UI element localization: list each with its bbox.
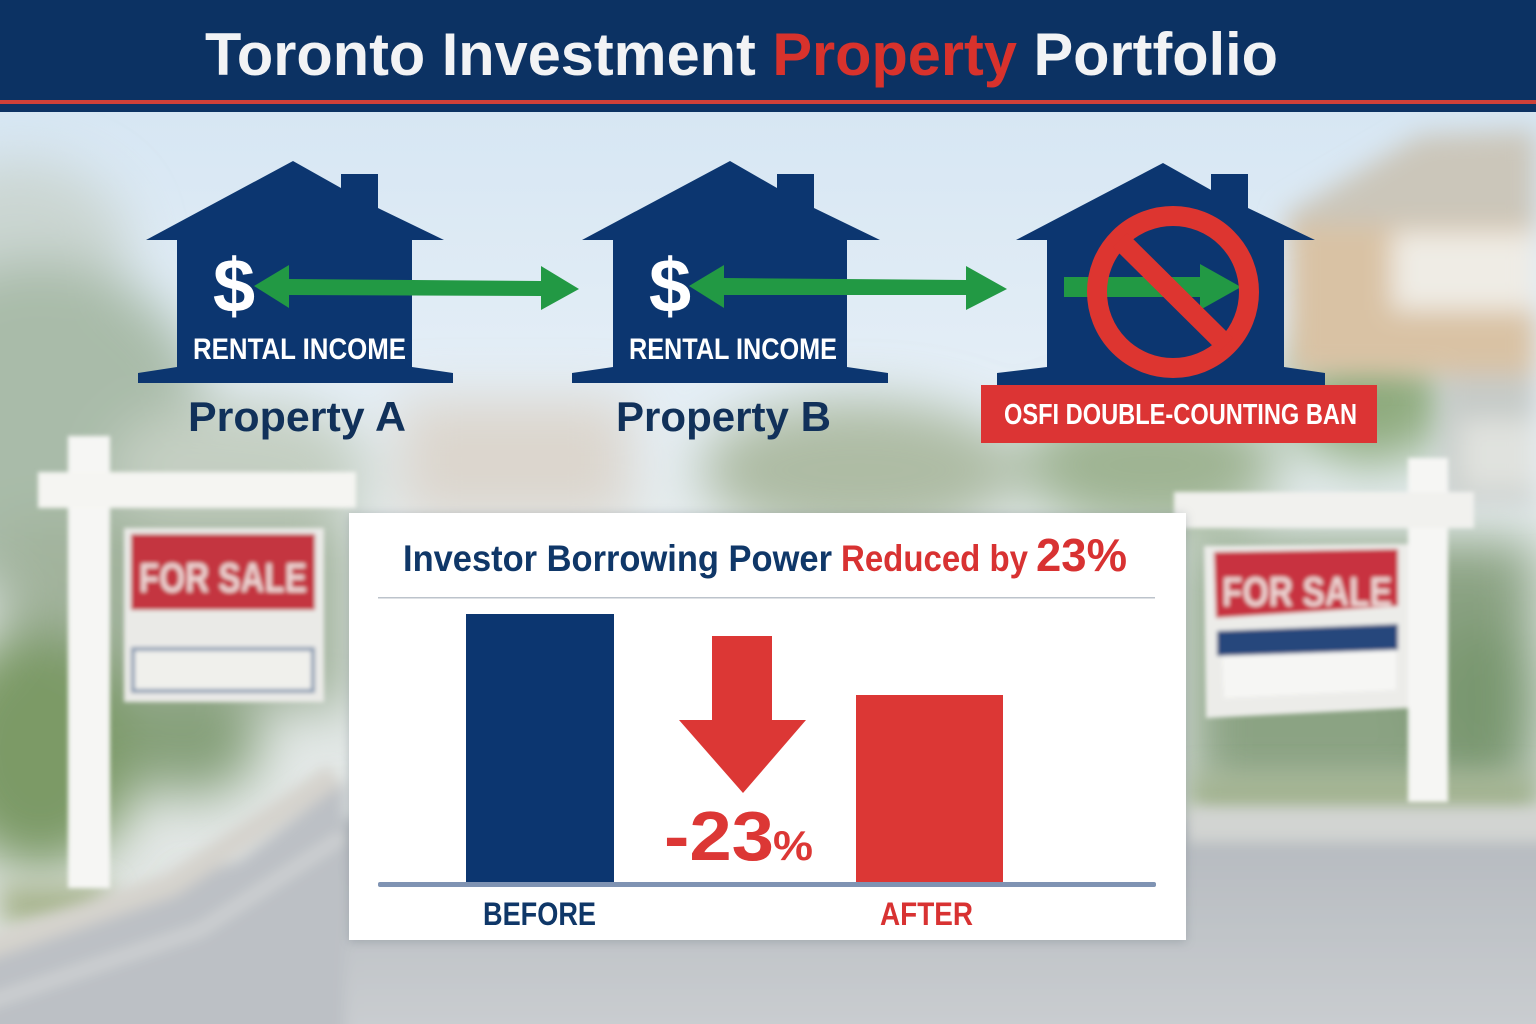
house: Property B bbox=[572, 161, 888, 383]
dollar icon: $ bbox=[213, 244, 255, 329]
chart panel: 23% bbox=[1036, 529, 1127, 581]
OSFI ban banner: OSFI DOUBLE-COUNTING BAN bbox=[1004, 399, 1357, 431]
change label: -23 bbox=[664, 797, 774, 875]
rental income label: RENTAL INCOME bbox=[629, 333, 837, 366]
blocked green arrow bbox=[1064, 264, 1241, 310]
chart panel bbox=[349, 513, 1186, 942]
for sale sign: left: FOR SALE bbox=[139, 554, 307, 601]
header band bbox=[0, 0, 1536, 112]
chart panel: % bbox=[773, 822, 813, 869]
prohibition icon bbox=[1097, 216, 1249, 368]
for sale sign: left bbox=[38, 436, 356, 888]
for sale sign: right: FOR SALE bbox=[1222, 568, 1392, 615]
arrow: B to blocked house bbox=[689, 265, 1007, 310]
bar: after bbox=[856, 695, 1003, 883]
chart heading: Investor Borrowing Power bbox=[403, 538, 832, 579]
rental income label: RENTAL INCOME bbox=[193, 333, 406, 366]
chart panel: Reduced by bbox=[841, 538, 1028, 579]
OSFI ban banner bbox=[981, 385, 1377, 443]
label: Property A: Property A bbox=[188, 393, 406, 440]
axis bbox=[378, 882, 1156, 887]
label: Property B: Property B bbox=[616, 393, 831, 440]
arrow: A to B bbox=[254, 265, 579, 310]
for sale sign: right bbox=[1174, 458, 1474, 802]
bar: before bbox=[466, 614, 614, 883]
house: Property A bbox=[138, 161, 453, 383]
title: Toronto Investment Property Portfolio bbox=[205, 21, 1278, 88]
label: before: BEFORE bbox=[483, 896, 596, 932]
label: after: AFTER bbox=[880, 896, 973, 932]
dollar icon: $ bbox=[649, 244, 691, 329]
house: blocked property bbox=[997, 163, 1325, 385]
down arrow bbox=[679, 636, 806, 793]
